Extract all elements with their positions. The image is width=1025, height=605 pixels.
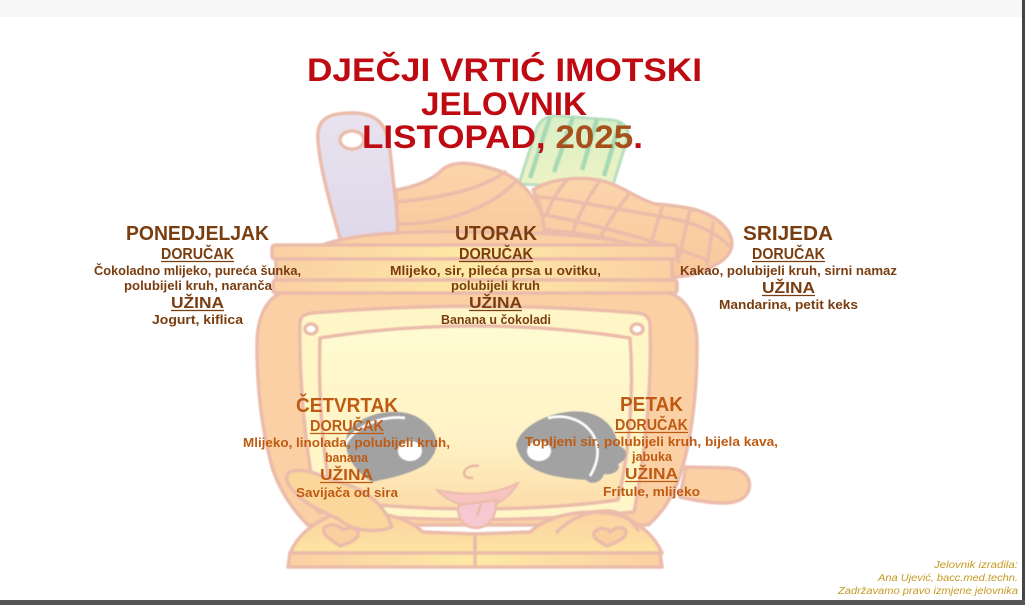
snack label: UŽINA bbox=[171, 294, 224, 312]
spatula handle bbox=[318, 113, 400, 242]
breakfast menu: Mlijeko, sir, pileća prsa u ovitku, bbox=[390, 264, 601, 278]
snack label: UŽINA bbox=[762, 279, 815, 297]
breakfast menu: Čokoladno mlijeko, pureća šunka, bbox=[94, 263, 301, 278]
snack menu: Savijača od sira bbox=[296, 486, 399, 500]
breakfast menu: polubijeli kruh, naranča bbox=[124, 279, 273, 293]
bottom window edge bbox=[0, 600, 1025, 605]
nose bbox=[464, 466, 478, 478]
snack label: UŽINA bbox=[320, 466, 373, 484]
left foot bbox=[287, 470, 475, 553]
right window edge bbox=[1022, 0, 1025, 605]
breakfast menu: Kakao, polubijeli kruh, sirni namaz bbox=[680, 264, 897, 278]
breakfast menu: banana bbox=[325, 451, 369, 465]
footer credit: Jelovnik izradila: bbox=[933, 559, 1018, 571]
jar lid bands bbox=[272, 232, 677, 293]
heading: Petak: PETAK bbox=[620, 394, 684, 416]
breakfast label: DORUČAK bbox=[310, 417, 385, 435]
snack label: UŽINA bbox=[625, 465, 678, 483]
panel: Monday bbox=[94, 223, 301, 327]
snack menu: Banana u čokoladi bbox=[441, 313, 551, 327]
breakfast menu: Topljeni sir, polubijeli kruh, bijela kava, bbox=[525, 435, 778, 449]
heading: Utorak: UTORAK bbox=[455, 223, 538, 245]
title: DJEČJI VRTIĆ IMOTSKI bbox=[307, 52, 702, 88]
breakfast label: DORUČAK bbox=[615, 416, 689, 434]
breakfast label: DORUČAK bbox=[161, 245, 235, 263]
left bread bbox=[396, 163, 545, 242]
title: LISTOPAD, 2025. bbox=[362, 119, 643, 155]
jar screen bbox=[300, 306, 650, 520]
left eye bbox=[345, 412, 437, 482]
breakfast label: DORUČAK bbox=[459, 245, 534, 263]
breakfast menu bbox=[525, 435, 778, 464]
breakfast menu: Mlijeko, linolada, polubijeli kruh, bbox=[243, 436, 450, 450]
breakfast menu: jabuka bbox=[631, 450, 673, 464]
right arm bbox=[680, 467, 749, 503]
breakfast label: DORUČAK bbox=[752, 245, 826, 263]
title: JELOVNIK bbox=[421, 86, 587, 122]
heading: Ponedjeljak: PONEDJELJAK bbox=[126, 223, 270, 245]
green stick bbox=[519, 116, 628, 188]
panel: Wednesday bbox=[680, 223, 897, 312]
mouth and tongue bbox=[437, 483, 518, 528]
panel: Tuesday bbox=[390, 223, 601, 327]
jar body bbox=[257, 292, 697, 525]
illustration: smiling jar mascot bbox=[257, 113, 749, 567]
snack menu: Jogurt, kiflica bbox=[152, 313, 244, 327]
breakfast menu bbox=[243, 436, 450, 465]
heading: Četvrtak: ČETVRTAK bbox=[296, 393, 399, 417]
breakfast menu: polubijeli kruh bbox=[451, 279, 540, 293]
breakfast menu bbox=[390, 264, 601, 293]
breakfast menu bbox=[94, 263, 301, 293]
base band bbox=[288, 534, 662, 567]
title bbox=[307, 52, 702, 155]
top browser strip bbox=[0, 0, 1025, 17]
snack menu: Mandarina, petit keks bbox=[719, 298, 858, 312]
panel: Thursday bbox=[243, 393, 450, 500]
right eye bbox=[516, 411, 626, 483]
right foot bbox=[475, 511, 662, 553]
snack menu: Fritule, mlijeko bbox=[603, 485, 700, 499]
right crosshatched bread bbox=[533, 178, 732, 277]
heading: Srijeda: SRIJEDA bbox=[743, 223, 833, 245]
footer credit: Ana Ujević, bacc.med.techn. bbox=[877, 572, 1018, 584]
panel: Friday bbox=[525, 394, 778, 499]
footer credit bbox=[837, 559, 1018, 597]
snack label: UŽINA bbox=[469, 294, 522, 312]
footer credit: Zadržavamo pravo izmjene jelovnika bbox=[837, 585, 1018, 597]
